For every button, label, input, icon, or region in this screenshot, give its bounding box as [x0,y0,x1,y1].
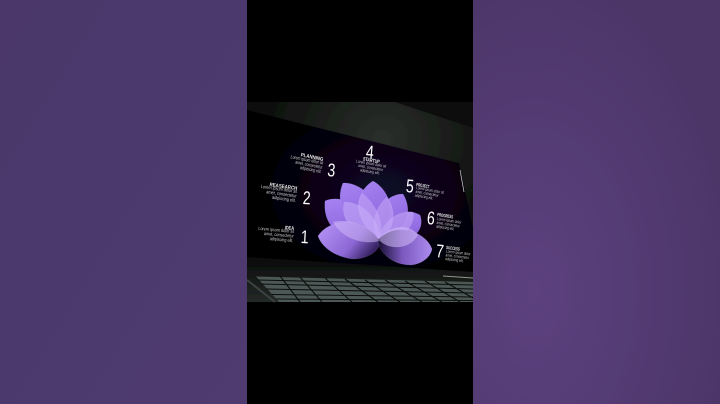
inner petal: lower right [379,227,418,247]
laptop deck [247,255,473,302]
inner petal: right [379,212,413,241]
step 6: progress [426,208,462,233]
step 1: idea: IDEA [285,225,295,231]
laptop lid right shadow [395,102,473,128]
step 1: idea: adipiscing elit. [270,236,294,243]
step 1: idea: Lorem ipsum dolor sit [258,225,295,234]
step 7: success: amet, consectetur [445,253,470,260]
step 6: progress: amet, consectetur [436,220,461,229]
step 4: startup [354,142,387,177]
step 3: planning: amet, consectetur [295,159,324,170]
inner petal: centre left [358,193,381,240]
inner petal: lower left [333,221,379,242]
step 2: research: 2 [302,188,311,209]
inner petal: centre right [374,197,393,240]
step 3: planning: PLANNING [300,152,324,163]
step 7: success: adipiscing elit. [445,257,464,263]
step 4: startup: STARTUP [363,156,380,165]
keyboard [247,276,473,302]
step 2: research [259,182,311,209]
step 3: planning: Lorem ipsum dolor sit [290,154,325,166]
step 7: success: SUCCESS [446,244,461,252]
petal: upper left [340,183,382,240]
step 3: planning: 3 [327,160,336,181]
petal: upper right [376,194,408,240]
step 1: idea [257,225,309,248]
step 6: progress: adipiscing elit. [436,224,455,232]
step 3: planning: adipiscing elit. [300,165,322,174]
step 7: success: 7 [435,241,445,262]
lotus flower [318,181,432,265]
petal: large right [378,230,432,265]
step 1: idea: amet, consectetur [264,231,294,239]
petal: far left upper [325,199,379,241]
step 1: idea: 1 [300,227,309,248]
step 3: planning [289,152,336,181]
step 5: project [405,176,444,203]
petal: far right upper [379,212,421,242]
left purple side panel [0,0,247,404]
step 6: progress: Lorem ipsum dolor [437,217,462,225]
step 2: research: adipiscing elit. [272,194,296,203]
step 6: progress: 6 [426,208,436,229]
petal: large left [318,222,379,259]
step 6: progress: PROGRESS [437,211,454,220]
step 5: project: Lorem ipsum dolor sit [416,186,444,195]
step 5: project: adipiscing elit. [414,193,433,201]
step 2: research: amet, consectetur [266,189,297,199]
step 5: project: amet, consectetur [415,189,440,198]
inner petal: left [343,202,379,240]
step 5: project: PROJECT [416,181,431,190]
screen edge highlight [460,170,464,192]
petal: top centre [359,181,391,240]
step 4: startup: amet, consectetur [358,163,384,172]
step 5: project: 5 [405,176,415,197]
step 2: research: Lorem ipsum dolor sit [260,184,298,194]
step 2: research: REASEARCH [269,182,298,192]
step 4: startup: 4 [365,142,375,163]
step 7: success: Lorem ipsum dolor [446,249,471,257]
right purple side panel [473,0,720,404]
step 7: success [435,241,471,264]
laptop photo [247,102,473,302]
step 4: startup: Lorem ipsum dolor sit [356,159,387,169]
step 4: startup: adipiscing elit. [360,168,380,176]
laptop screen [247,110,473,272]
